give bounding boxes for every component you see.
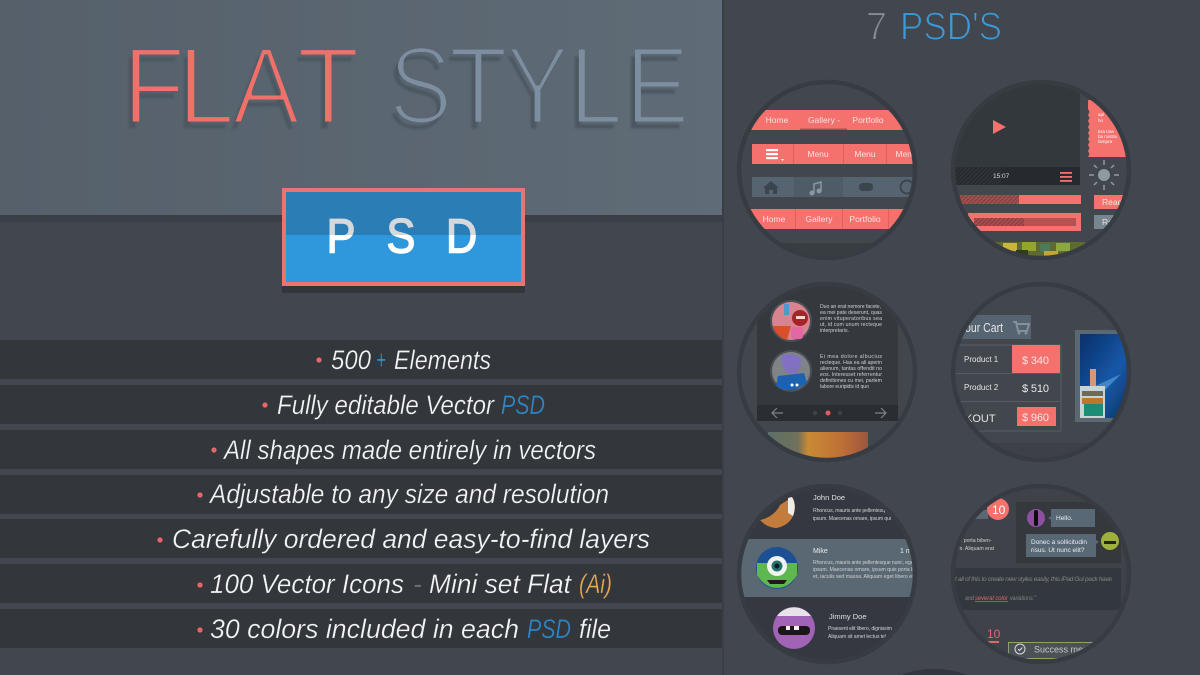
success message: Success message — [1034, 644, 1107, 654]
testimonial text one: Duo an erat nemore facete, — [820, 304, 881, 310]
torn note card: ho — [1098, 118, 1104, 123]
circle preview: media player — [950, 80, 1131, 262]
product image: glue bottle — [1075, 330, 1127, 422]
nav bar: Home Gallery Portfolio lower: Gallery — [806, 214, 833, 224]
circle preview: shopping cart — [945, 282, 1135, 463]
torn note card: Era tota — [1098, 129, 1114, 134]
comment: John Doe: ipsum. Maecenas ornare, ipsum qui — [813, 516, 891, 522]
title: FLAT STYLE: STYLE — [389, 24, 689, 147]
comment: John Doe: Rhoncus, mauris ante pellentesq — [813, 508, 885, 514]
feature row: Adjustable to any size and resolution — [0, 475, 722, 514]
comment: Mike highlighted: et, iaculis sed massa. Aliquam eget libero eu — [813, 574, 915, 580]
slider panel — [757, 282, 898, 421]
progress bar two — [968, 213, 1081, 231]
quote band: and — [965, 595, 974, 602]
feature row: 100 Vector Icons - Mini set Flat (Ai) — [0, 564, 722, 603]
testimonial text one: ea mei pate deserunt, quas — [820, 310, 882, 316]
feature row: 500+ Elements: 500 — [331, 345, 371, 375]
nav bar: Home Gallery Portfolio: Portfolio — [852, 115, 884, 125]
progress bar one — [960, 195, 1081, 204]
badge: PSD button — [282, 188, 525, 293]
testimonial text two: recteque. Has ea ali aperin — [820, 360, 882, 366]
testimonial text two: definitiones cu mei, partem — [820, 378, 882, 384]
price table: $ 960 — [1022, 412, 1049, 424]
testimonial text two: alienum, tantas offendit no — [820, 366, 882, 372]
torn note card: ba nostra — [1098, 134, 1117, 139]
feature row: 30 colors included in each PSD file: PSD — [527, 614, 571, 644]
chat window: Donec a sollicitudin — [1031, 539, 1087, 546]
title: FLAT STYLE: FLAT — [123, 25, 359, 147]
price table: Product 1 — [964, 355, 999, 364]
panel: title header — [0, 0, 722, 222]
circle preview: cropped seventh ring — [901, 669, 967, 675]
nav bar: Home Gallery Portfolio lower — [750, 209, 904, 229]
price table: $ 510 — [1022, 383, 1049, 395]
quote band — [950, 568, 1121, 610]
counter 10 — [988, 630, 1000, 643]
image strip — [995, 242, 1085, 256]
button: gray — [1094, 215, 1114, 229]
feature row: 30 colors included in each PSD file: file — [579, 614, 611, 644]
torn note card: fampra — [1098, 139, 1113, 144]
nav bar: hamburger and menu items: Menu — [895, 149, 917, 159]
notification badge 10: 10 — [992, 503, 1006, 517]
quote band: g — [955, 595, 959, 602]
comment: Mike highlighted: Rhoncus, mauris ante pellentesque nunc, eget — [813, 560, 916, 566]
comment: Mike highlighted — [737, 539, 917, 597]
avatar: purple monster — [770, 350, 812, 392]
chat window: risus. Ut nunc elit? — [1031, 547, 1085, 554]
nav bar: hamburger and menu items: Menu — [807, 149, 829, 159]
feature row: Carefully ordered and easy-to-find layers: Carefully ordered and easy-to-find layers — [172, 524, 650, 554]
circle preview: navigation menus — [737, 80, 917, 263]
button: Read — [1094, 195, 1126, 209]
icon: sun — [1089, 160, 1119, 190]
feature row: 100 Vector Icons - Mini set Flat (Ai): - — [413, 569, 422, 599]
comment: Mike highlighted: 1 min — [900, 548, 917, 555]
feature row: Carefully ordered and easy-to-find layers — [0, 519, 722, 558]
testimonial text one: enim vituperatoribus sea — [820, 316, 882, 322]
title: FLAT STYLE — [123, 24, 689, 147]
torn note card — [1088, 100, 1128, 157]
quote band: variations." — [1010, 595, 1037, 602]
video player: 15:07 — [993, 173, 1010, 180]
chat window: Hello. — [1056, 515, 1073, 522]
feature row: Fully editable Vector PSD — [0, 385, 722, 424]
feature row: 100 Vector Icons - Mini set Flat (Ai): (Ai) — [579, 569, 612, 599]
comment: Jimmy Doe: Aliquam sit amet lectus tel — [828, 634, 886, 640]
cart tab: our Cart — [965, 321, 1003, 335]
feature row: 500+ Elements — [0, 340, 722, 379]
cart tab — [962, 315, 1031, 339]
torn note card: api — [1098, 112, 1104, 117]
feature row: 100 Vector Icons - Mini set Flat (Ai): 100 Vector Icons — [210, 569, 404, 599]
testimonial text two — [820, 354, 882, 390]
feature list — [0, 340, 722, 648]
feature row: 500+ Elements: + — [376, 345, 386, 375]
avatar: colourful monsters — [770, 300, 812, 342]
icon bar: home, music, gamepad, clock — [752, 177, 917, 197]
testimonial text one — [820, 304, 882, 334]
feature row: Adjustable to any size and resolution: Adjustable to any size and resolution — [208, 479, 609, 509]
testimonial text two: eos. Interesset referrentur — [820, 372, 882, 378]
nav bar: Home Gallery Portfolio lower: Home — [763, 214, 786, 224]
nav bar: Home Gallery Portfolio: Gallery - — [808, 115, 840, 125]
testimonial text two: labore euripidis id quo — [820, 384, 869, 390]
price table — [945, 345, 1061, 431]
feature row: All shapes made entirely in vectors — [0, 430, 722, 469]
comment: Jimmy Doe — [773, 607, 892, 649]
nav bar: Home Gallery Portfolio lower: Portfolio — [849, 214, 881, 224]
nav bar: Home Gallery Portfolio: Home — [766, 115, 789, 125]
text snippet — [958, 538, 995, 552]
heading: 7 PSD'S: PSD'S — [900, 6, 1002, 48]
testimonial text one: interpretaris. — [820, 328, 849, 334]
quote band: t all of this to create new styles easily, this iPad Gui pack have — [955, 576, 1112, 583]
text snippet: m porta biben- — [958, 538, 992, 544]
chat window — [1016, 502, 1121, 563]
price table: $ 340 — [1022, 355, 1049, 367]
price table: KOUT — [965, 413, 996, 425]
comment: Mike highlighted: Mike — [813, 548, 828, 555]
text snippet: m. Aliquam erat — [958, 546, 995, 552]
price table: Product 2 — [964, 383, 999, 392]
image strip: painting — [768, 432, 868, 458]
feature row: Fully editable Vector PSD: PSD — [501, 390, 545, 420]
success message — [1008, 642, 1107, 658]
comment: Jimmy Doe: Jimmy Doe — [829, 612, 867, 621]
nav bar: hamburger and menu items — [752, 144, 917, 164]
feature row: All shapes made entirely in vectors: All shapes made entirely in vectors — [222, 435, 596, 465]
comment: John Doe — [760, 493, 891, 528]
feature row: Fully editable Vector PSD: Fully editable Vector — [277, 390, 495, 420]
button: Read: Read — [1102, 197, 1123, 207]
heading: 7 PSD'S: 7 — [866, 6, 887, 48]
comment: John Doe: John Doe — [813, 493, 845, 502]
nav bar: Home Gallery Portfolio — [751, 110, 903, 130]
feature row: 30 colors included in each PSD file: 30 colors included in each — [210, 614, 519, 644]
circle preview: chat and notifications — [950, 484, 1131, 664]
testimonial text one: ut, id cum unum recteque — [820, 322, 882, 328]
feature row: 100 Vector Icons - Mini set Flat (Ai): Mini set Flat — [429, 569, 572, 599]
heading: 7 PSD'S — [866, 6, 1002, 48]
feature row: 30 colors included in each PSD file — [0, 609, 722, 648]
quote band: several color — [975, 595, 1009, 602]
feature row: 500+ Elements: Elements — [394, 345, 491, 375]
nav bar: hamburger and menu items: Menu — [854, 149, 876, 159]
circle preview: testimonial slider — [737, 282, 917, 464]
comment: Jimmy Doe: Praesent elit libero, dignissim — [828, 626, 892, 632]
circle preview: comments list — [737, 484, 917, 664]
notification badge 10 — [976, 498, 1009, 520]
badge: PSD button: P S D — [327, 209, 477, 263]
button: gray: Read — [1102, 217, 1123, 227]
testimonial text two: Ei mea dolore albucius — [820, 354, 882, 360]
comment: Mike highlighted: ipsum. Maecenas ornare, ipsum quis porta bi — [813, 567, 915, 573]
counter 10: 10 — [987, 627, 1001, 641]
video player — [950, 80, 1080, 185]
